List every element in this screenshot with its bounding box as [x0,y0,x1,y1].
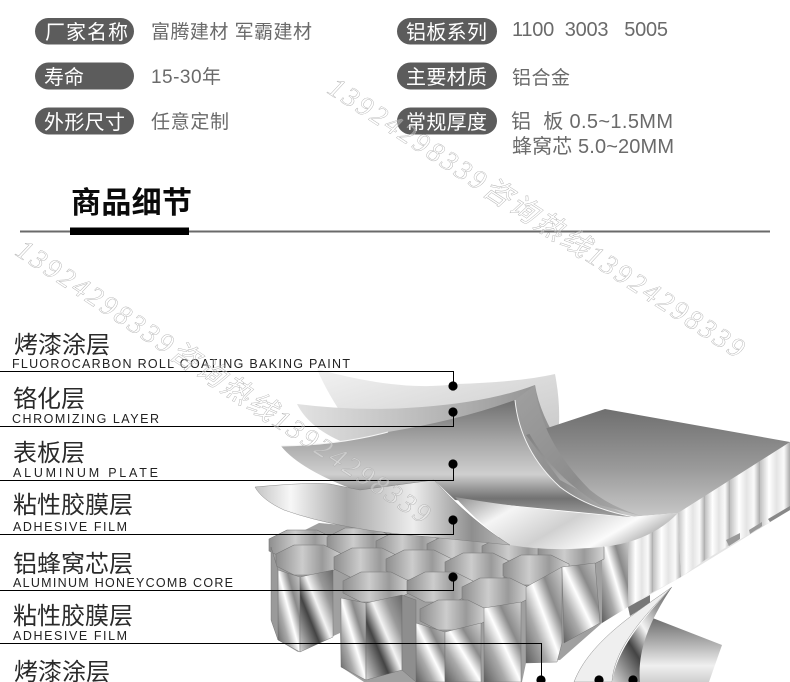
bright panel skin [455,497,678,549]
spec pill: 寿命 [35,62,134,90]
lower layer dots [594,675,638,682]
layer label: 表板层 [13,440,158,480]
layer label: 粘性胶膜层: 粘性胶膜层 [13,492,133,519]
illustration: honeycomb aluminium panel [255,369,790,682]
spec value: thickness: 铝 板 0.5~1.5MM [511,110,673,133]
spec value: lifespan: 15-30年 [151,66,221,88]
chromizing sheet [297,385,629,517]
lower curled sheets [574,587,722,682]
honeycomb core base [271,523,602,682]
layer label: 表板层: ALUMINUM PLATE [13,466,158,480]
honeycomb hex cells [269,528,604,630]
spec value: thickness [511,110,674,158]
heading: 商品细节: 商品细节 [71,187,192,220]
layer label: 粘性胶膜层 lower: ADHESIVE FILM [13,629,127,643]
layer label: 铝蜂窝芯层: ALUMINUM HONEYCOMB CORE [13,576,233,590]
leader line 4 [0,515,458,534]
leader line 6 [0,644,546,682]
spec pill: 厂家名称 [35,18,134,44]
leader line 5 [0,572,458,590]
layer label: 粘性胶膜层 lower [13,603,133,643]
spec pill: 厂家名称: 厂家名称 [45,21,128,44]
leader line 1 [0,372,458,391]
spec pill: 外形尺寸: 外形尺寸 [44,111,125,134]
layer label: 粘性胶膜层 [13,492,133,534]
spec value: material: 铝合金 [512,67,570,89]
main top plate [526,409,790,517]
spec pill: 寿命: 寿命 [44,66,84,89]
layer label: 烤漆涂层 [12,332,350,371]
layer label: 铬化层 [12,386,159,426]
chromizing sheet fold [515,385,645,517]
leader line 2 [0,407,458,426]
layer label: 铬化层: CHROMIZING LAYER [12,412,159,426]
leader line 3 [0,459,458,480]
surface plate white edge [281,400,640,518]
top coating sheet [317,369,559,440]
spec value: manufacturer: 富腾建材 军霸建材 [151,21,312,43]
layer label: 烤漆涂层: 烤漆涂层 [14,332,110,359]
spec value: size: 任意定制 [151,111,229,133]
layer label: 表板层: 表板层 [13,440,85,467]
watermark lower: 13924298339咨询热线13924298339 [10,234,436,530]
layer label: 粘性胶膜层: ADHESIVE FILM [13,520,127,534]
spec pill: 常规厚度 [397,108,497,134]
spec pill: 外形尺寸 [35,108,134,134]
honeycomb prism walls [271,547,600,682]
layer label: 粘性胶膜层 lower: 粘性胶膜层 [13,603,133,630]
layer label: 铝蜂窝芯层 [13,551,233,590]
watermark upper: 13924298339咨询热线13924298339 [322,72,750,365]
surface plate sheet [281,400,640,518]
spec pill: 铝板系列: 铝板系列 [406,21,487,44]
panel side edge [602,442,790,623]
layer label: 铬化层: 铬化层 [13,386,85,413]
spec pill: 常规厚度: 常规厚度 [406,111,487,134]
spec pill: 主要材质: 主要材质 [406,66,487,89]
spec pill: 铝板系列 [397,18,497,44]
heading rule [20,228,770,235]
adhesive film sheet [255,480,510,545]
spec pill: 主要材质 [397,62,497,90]
spec value: thickness: 蜂窝芯 5.0~20MM [512,135,674,158]
layer label: 烤漆涂层: FLUOROCARBON ROLL COATING BAKING PAINT [12,357,350,371]
layer label: 铝蜂窝芯层: 铝蜂窝芯层 [13,551,133,578]
spec value: series: 1100 3003 5005 [512,19,668,41]
